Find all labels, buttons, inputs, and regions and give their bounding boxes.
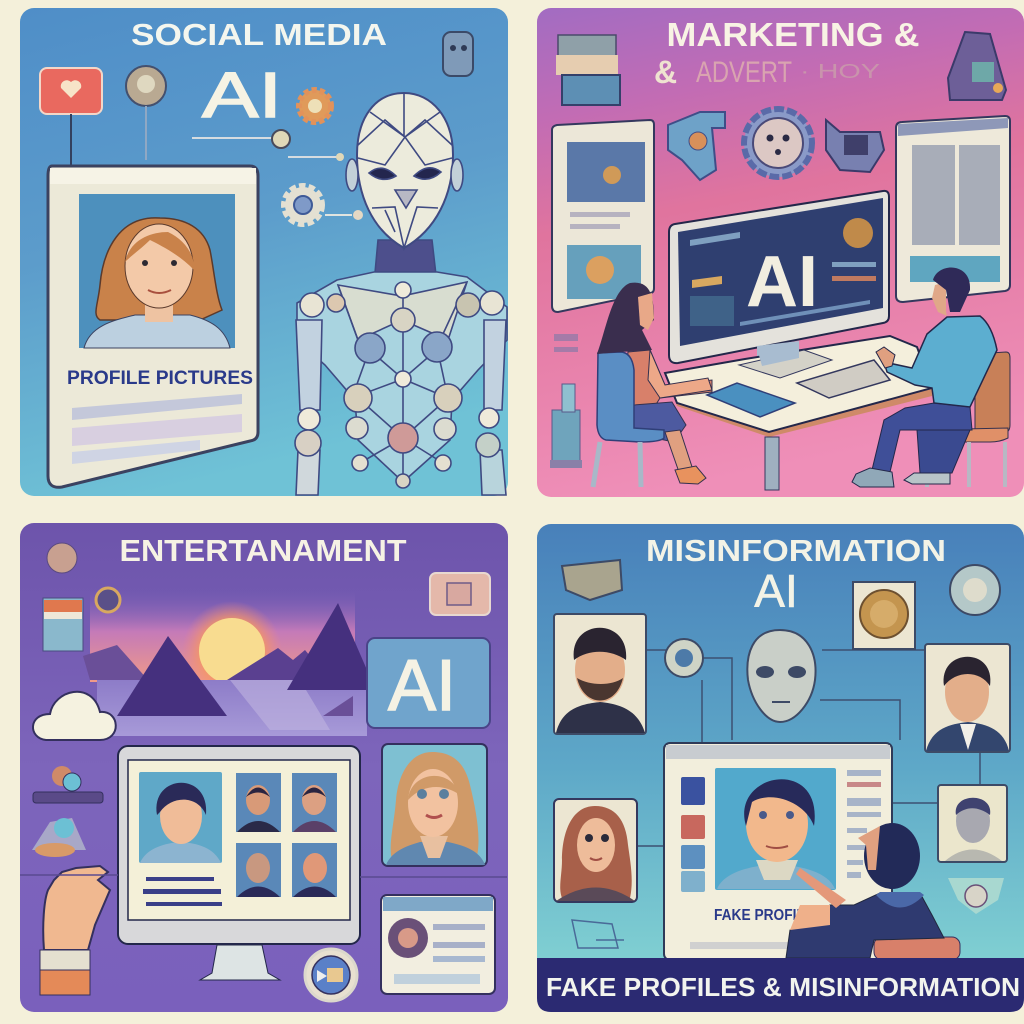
side buttons [681,777,705,892]
large portrait [139,772,222,863]
right browser card [896,116,1010,302]
tablet [707,383,795,417]
icon: top right frame [430,573,490,615]
left browser card [552,120,654,312]
AI tile [367,638,490,728]
icon: dark badge [826,120,884,172]
connector lines [636,650,980,846]
woman portrait [554,799,637,902]
icon: medallion [126,66,166,160]
icon: orange gear [299,90,331,122]
caption: fake profile: FAKE PROFILE [714,907,814,924]
icon: connector node [192,130,344,161]
banner: fake profiles and misinformation: FAKE PROFILES & MISINFORMATION [546,972,1020,1002]
heading: AI: AI [754,565,798,617]
man portrait: beard [554,614,646,734]
robot torso [297,272,507,482]
robot head [357,93,453,248]
man portrait: grey [938,785,1007,862]
panel: entertainment [20,523,508,1012]
fake profile window [664,743,892,960]
heading: ampersand: & [654,54,677,90]
bottle on left [550,384,582,468]
panel: misinformation [537,524,1024,1012]
monitor base [739,350,832,378]
robot arms [296,320,322,410]
landscape scene [83,590,367,736]
icon: stacked papers [556,35,620,105]
play button icon [305,949,357,1001]
heading: misinformation: MISINFORMATION [646,533,946,568]
divider line [20,875,507,877]
icon: small teal badge [665,639,703,677]
heading: marketing: MARKETING & [666,16,920,53]
caption: profile pictures: PROFILE PICTURES [67,368,253,389]
heading: faded remainder: · HOY [800,61,880,83]
profile card [48,166,258,487]
coin tile [853,582,915,649]
AI head [747,630,816,722]
icon: globe badge [950,565,1000,615]
icon: sun face [744,109,812,177]
icon: top right figure [948,32,1006,100]
woman at desk [593,283,712,487]
panel: social media AI [20,8,508,496]
icon: top left ornament [562,560,622,600]
text lines [72,394,242,464]
profile portrait [79,194,235,348]
main monitor [669,191,889,367]
robot neck [374,240,437,284]
heading: social media: SOCIAL MEDIA [131,17,387,52]
robot nodes [295,282,504,488]
icon: top right head [443,32,473,76]
text lines [847,770,881,878]
small label on left [554,334,578,352]
hand icon [40,866,110,995]
cloud icon [33,692,116,740]
woman portrait [382,744,487,866]
portrait [715,768,836,890]
icon: colorful device [668,112,725,180]
keyboard [797,360,890,398]
person pointing [786,823,960,960]
monitor AI label: AI [746,242,818,322]
tile AI text: AI [388,646,456,726]
icon: grey gear [285,187,363,223]
icon: like bubble [40,68,102,166]
man portrait: suit [925,644,1010,752]
desk [665,336,932,490]
heading: advert faded: ADVERT [696,56,792,89]
icon: pen tool [572,920,624,948]
icon: fingerprint emblem [948,878,1004,914]
man at desk [852,268,1010,487]
banner: fake profiles and misinformation [537,958,1024,1012]
text lines [143,877,222,906]
small icon: gallery [43,598,83,651]
icon: top left ornament [47,543,120,612]
panel: marketing and advertising [537,8,1024,497]
profile mini card [381,895,495,994]
heading: entertainment: ENTERTANAMENT [120,533,407,568]
heading: AI: AI [202,59,282,131]
four thumbnails [236,773,337,897]
desktop monitor [118,746,360,980]
small icons left [32,766,103,857]
robot figure [295,93,507,495]
